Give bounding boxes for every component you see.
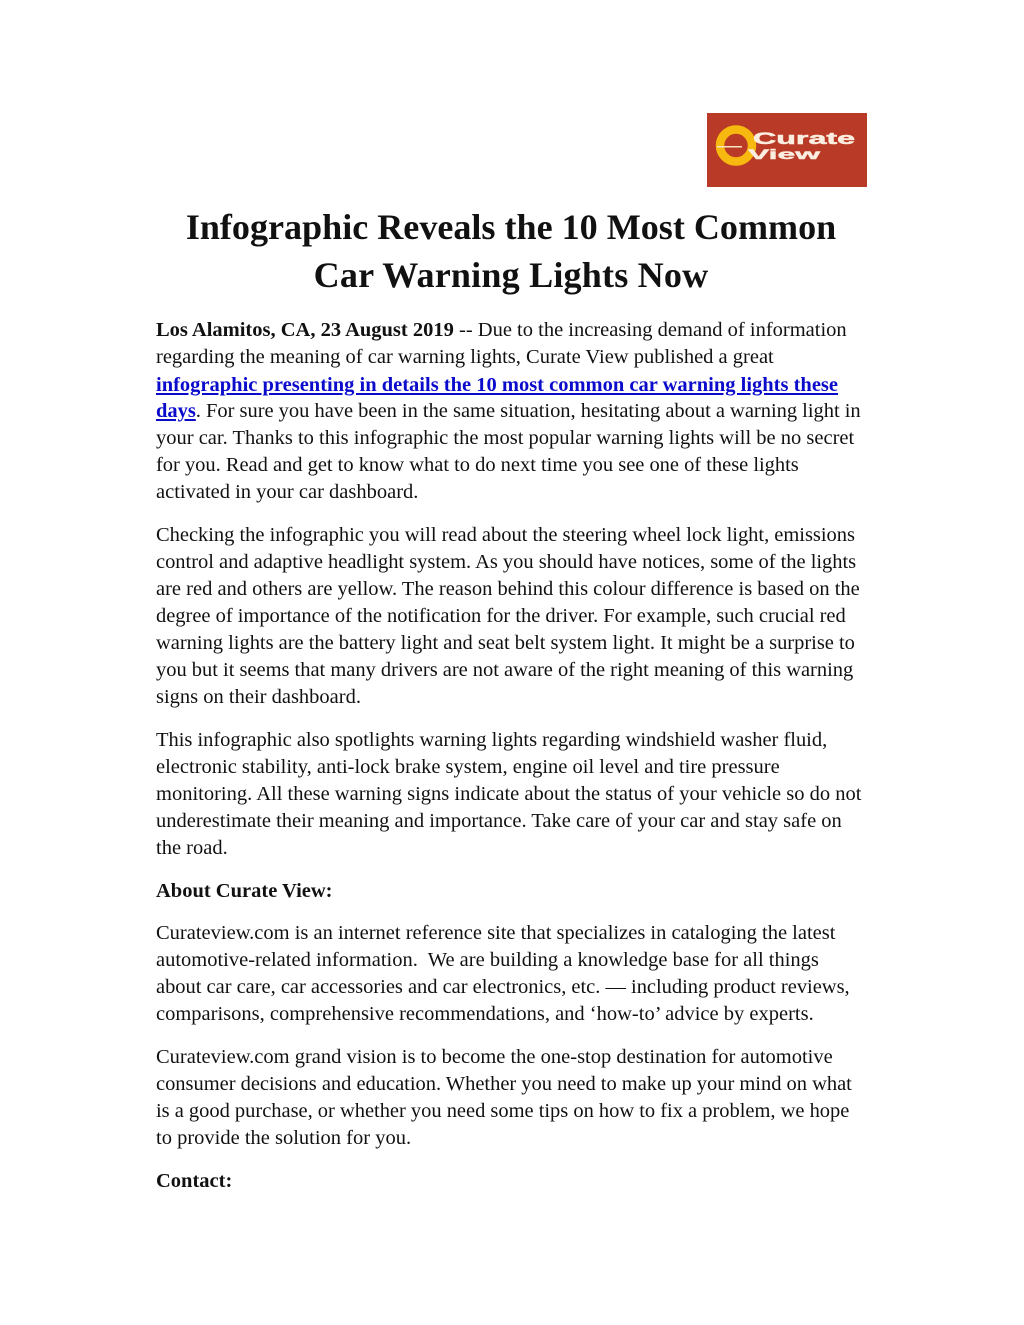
text: are red and others are yellow. The reason behind this colour difference is based on the xyxy=(156,578,860,600)
heading: Contact: Contact: xyxy=(156,1170,232,1192)
paragraph: infographic content xyxy=(156,524,860,708)
text: degree of importance of the notification for the driver. For example, such crucial red xyxy=(156,605,846,627)
logo: Curate View: Curate xyxy=(753,129,855,148)
text: Los Alamitos, CA, 23 August 2019 -- Due to the increasing demand of information xyxy=(156,319,847,341)
text: about car care, car accessories and car electronics, etc. — including product reviews, xyxy=(156,976,850,998)
text: to provide the solution for you. xyxy=(156,1127,411,1149)
text: signs on their dashboard. xyxy=(156,686,361,708)
logo: Curate View: View xyxy=(748,146,820,162)
text: automotive-related information. We are building a knowledge base for all things xyxy=(156,949,819,971)
text: infographic presenting in details the 10 most common car warning lights these xyxy=(156,374,838,396)
text: activated in your car dashboard. xyxy=(156,481,418,503)
text: Curateview.com grand vision is to become the one-stop destination for automotive xyxy=(156,1046,833,1068)
paragraph: other warning lights xyxy=(156,729,862,859)
text: you but it seems that many drivers are not aware of the right meaning of this warning xyxy=(156,659,853,681)
text: warning lights are the battery light and seat belt system light. It might be a surprise to xyxy=(156,632,855,654)
text: Infographic Reveals the 10 Most Common xyxy=(186,207,836,247)
text: consumer decisions and education. Whether you need to make up your mind on what xyxy=(156,1073,852,1095)
text: regarding the meaning of car warning lights, Curate View published a great xyxy=(156,346,774,368)
text: days. For sure you have been in the same situation, hesitating about a warning light in xyxy=(156,400,861,422)
text: electronic stability, anti-lock brake system, engine oil level and tire pressure xyxy=(156,756,780,778)
paragraph: about xyxy=(156,922,850,1025)
paragraph: press release intro xyxy=(156,319,861,503)
text: Curateview.com is an internet reference site that specializes in cataloging the latest xyxy=(156,922,835,944)
paragraph: vision xyxy=(156,1046,852,1149)
text: is a good purchase, or whether you need some tips on how to fix a problem, we hope xyxy=(156,1100,849,1122)
text: control and adaptive headlight system. As you should have notices, some of the lights xyxy=(156,551,856,573)
text: monitoring. All these warning signs indicate about the status of your vehicle so do not xyxy=(156,783,861,805)
text: comparisons, comprehensive recommendations, and ‘how-to’ advice by experts. xyxy=(156,1003,814,1025)
text: This infographic also spotlights warning lights regarding windshield washer fluid, xyxy=(156,729,827,751)
text: Checking the infographic you will read about the steering wheel lock light, emissions xyxy=(156,524,855,546)
text: Car Warning Lights Now xyxy=(314,255,708,295)
text: for you. Read and get to know what to do next time you see one of these lights xyxy=(156,454,799,476)
logo: Curate View xyxy=(707,113,867,187)
text: the road. xyxy=(156,837,228,859)
text: underestimate their meaning and importance. Take care of your car and stay safe on xyxy=(156,810,842,832)
title xyxy=(186,207,836,295)
heading: About Curate View: About Curate View: xyxy=(156,880,333,902)
text: your car. Thanks to this infographic the most popular warning lights will be no secret xyxy=(156,427,854,449)
